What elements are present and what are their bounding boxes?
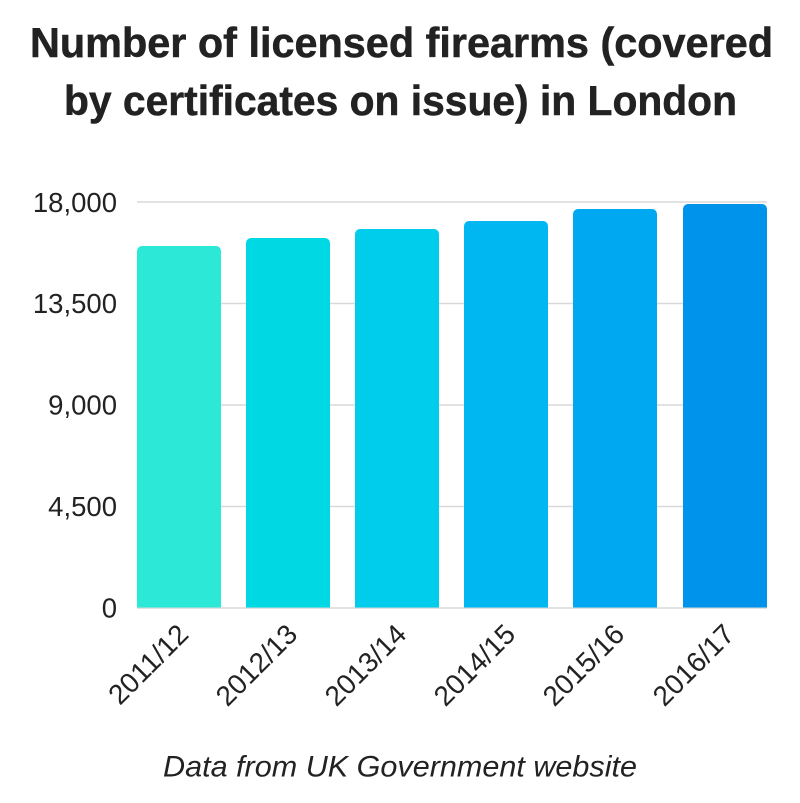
bar 2013/14: [355, 229, 439, 608]
y axis labels: 18,000: [33, 187, 117, 218]
title: by certificates on issue) in London: [64, 77, 737, 124]
title: Number of licensed firearms (covered: [30, 19, 773, 66]
y axis labels: 13,500: [33, 288, 117, 319]
x axis labels: 2016/17: [647, 618, 740, 712]
y axis labels: 4,500: [48, 491, 117, 522]
bar 2015/16: [573, 209, 657, 608]
x axis labels: 2011/12: [102, 618, 194, 710]
x axis labels: 2014/15: [428, 618, 521, 712]
source note: Data from UK Government website: [163, 750, 637, 784]
y axis labels: [33, 187, 117, 624]
x axis labels: 2015/16: [537, 618, 630, 712]
bar 2014/15: [464, 221, 548, 608]
x axis labels: 2012/13: [210, 618, 303, 712]
y axis labels: 9,000: [48, 390, 117, 420]
x axis labels: 2013/14: [319, 618, 412, 712]
bar 2011/12: [137, 246, 221, 608]
y axis labels: 0: [102, 592, 117, 624]
bar 2016/17: [683, 204, 767, 608]
bar chart: [137, 204, 767, 608]
bar 2012/13: [246, 238, 330, 608]
x axis labels: [102, 618, 740, 712]
title: [30, 19, 773, 124]
